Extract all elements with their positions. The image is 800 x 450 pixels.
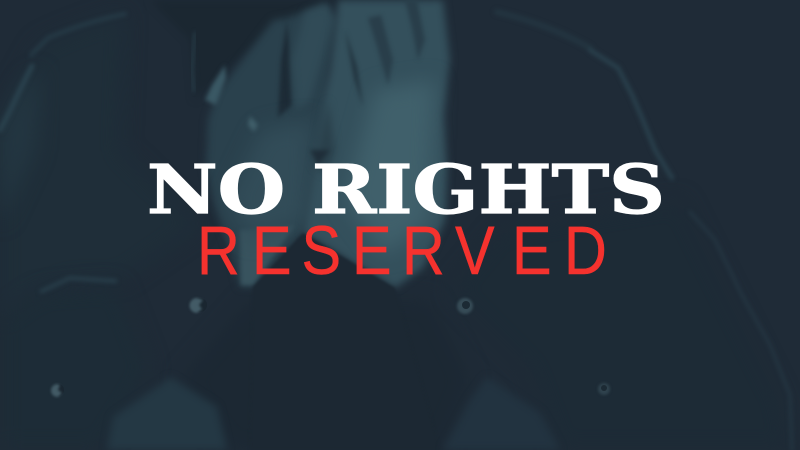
rim light: left shoulder — [0, 14, 125, 130]
lower arm highlight: left — [107, 377, 227, 450]
shirt buttons — [51, 298, 610, 397]
hair — [150, 0, 430, 100]
right hand — [303, 0, 450, 288]
sleeve fold — [40, 278, 117, 292]
shadow under the hands — [250, 233, 440, 450]
title: no rights: NO RIGHTS — [147, 150, 665, 229]
subtitle: reserved: RESERVED — [197, 212, 607, 289]
left hand — [192, 3, 336, 287]
lower arm highlight: right — [443, 377, 560, 450]
rim light: right shoulder — [497, 12, 792, 450]
